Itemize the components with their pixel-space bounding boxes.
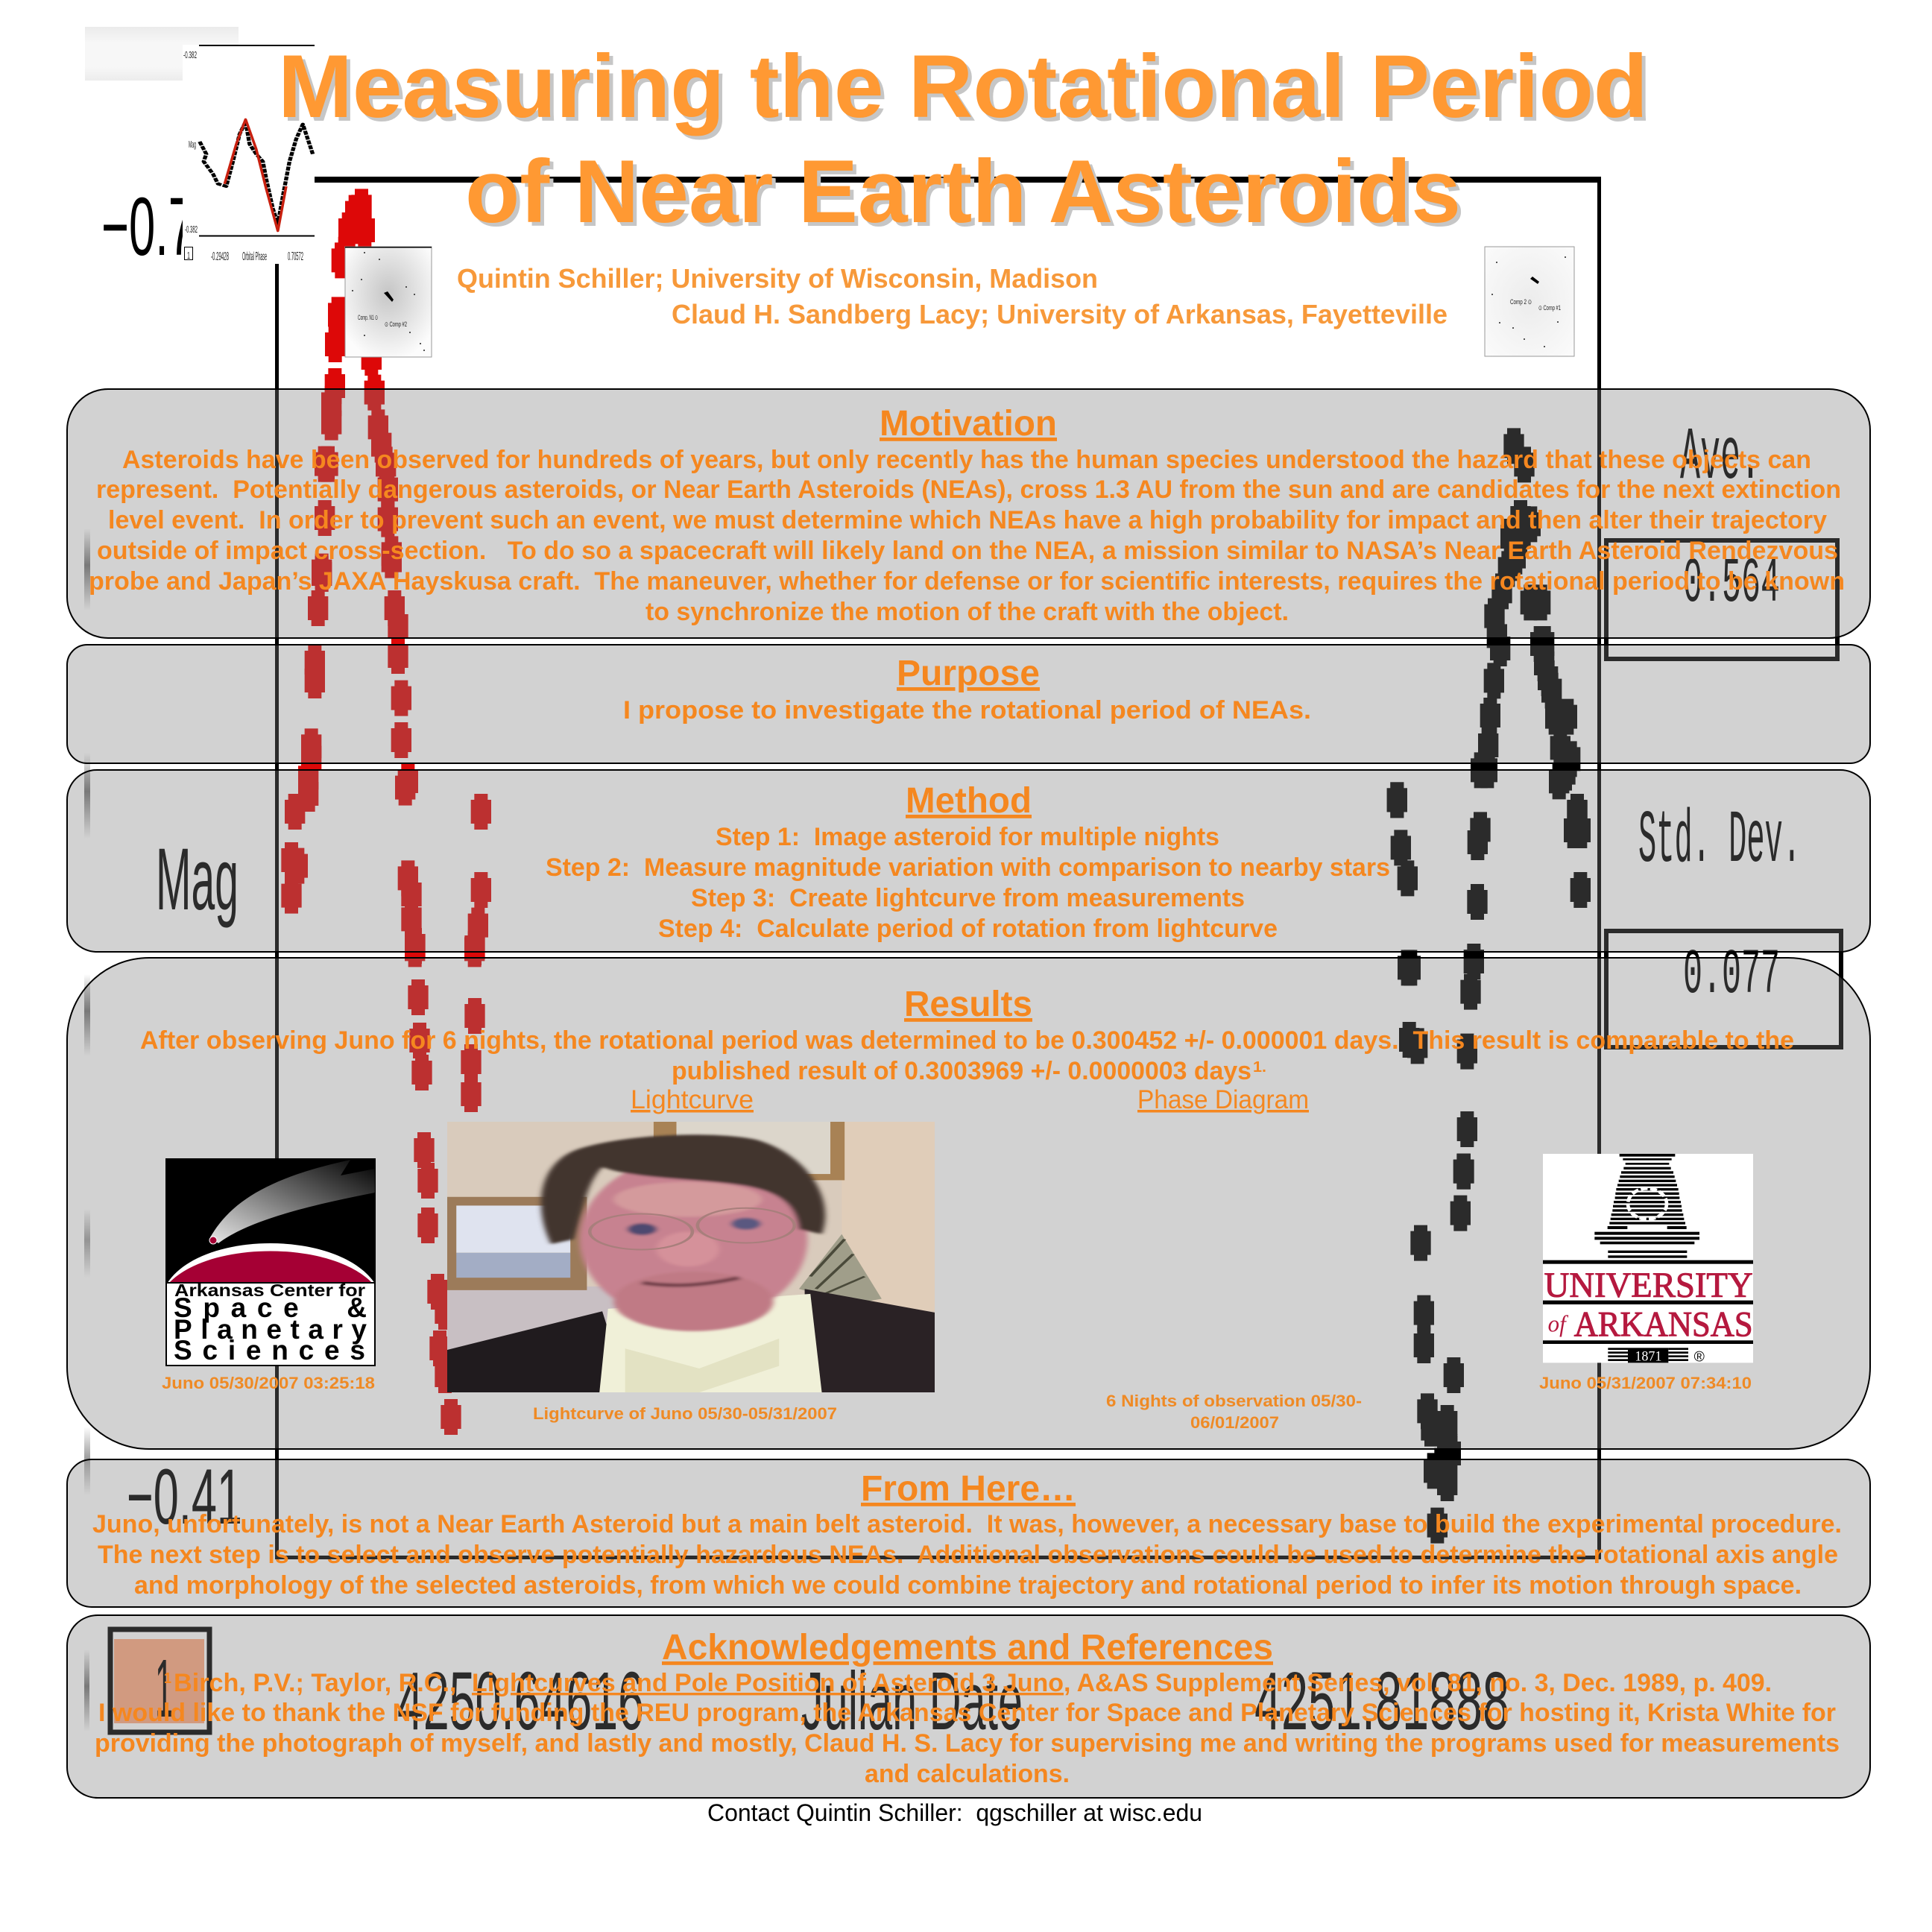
inset labels	[183, 49, 303, 263]
section: motivation: outside of impact cross-section. To do so a spacecraft will likely land on the NEA, a mission similar to NASA’s Near Earth Asteroid Rendezvous	[97, 537, 1838, 565]
section: motivation: probe and Japan’s JAXA Hayskusa craft. The maneuver, whether for defense or for scientific interests, requires the rotational period to be known	[89, 567, 1845, 596]
image captions: 6 Nights of observation 05/30-	[1106, 1392, 1362, 1410]
inset labels: -0.29428	[211, 250, 229, 263]
section: acknowledgements and references: and calculations.	[865, 1760, 1070, 1788]
inset labels: -0.382	[185, 224, 198, 235]
section: method: Step 3: Create lightcurve from measurements	[691, 884, 1245, 912]
section: results text: 1.	[1253, 1059, 1266, 1076]
image: Juno frame 05/30: ⊙ Comp #2	[385, 321, 407, 328]
inset labels: -0.382	[183, 49, 197, 60]
image captions: 06/01/2007	[1190, 1413, 1279, 1432]
section: results text: published result of 0.3003969 +/- 0.0000003 days	[672, 1057, 1251, 1085]
section: purpose	[623, 654, 1311, 724]
contact line: Contact Quintin Schiller: qgschiller at wisc.edu	[707, 1799, 1202, 1826]
small phase diagram inset: 0.70572	[288, 250, 303, 263]
section: motivation: Asteroids have been observed for hundreds of years, but only recently has the human species understood the hazard that these objects can	[122, 446, 1811, 474]
section: from here: From Here…	[861, 1469, 1076, 1509]
chart axis labels: 1	[155, 1643, 173, 1734]
section: method: Step 4: Calculate period of rotation from lightcurve	[658, 915, 1278, 943]
section: from here: The next step is to select and observe potentially hazardous NEAs. Additional observations could be used to determine the rotational axis angle	[98, 1541, 1838, 1569]
chart axis labels: Mag	[156, 830, 239, 929]
logo: University of Arkansas: ARKANSAS	[1574, 1306, 1753, 1345]
section: acknowledgements and references: I would like to thank the NSF for funding the REU program, the Arkansas Center for Space and Planetary Sciences for hosting it, Krista White for	[98, 1699, 1836, 1727]
section: method: Method	[906, 781, 1032, 821]
image: Juno frame 05/31: ⊙ Comp #1	[1538, 304, 1561, 312]
logo: Arkansas Center for Space and Planetary Sciences: Sciences	[174, 1335, 365, 1366]
image: Juno frame 05/30: Comp. N1 ⊙	[358, 314, 378, 321]
logo: Arkansas Center for Space and Planetary Sciences: Space &	[174, 1292, 367, 1323]
image: Juno frame 05/30	[345, 247, 432, 357]
section: results text: Results	[904, 985, 1032, 1024]
panel: purpose background	[67, 645, 1870, 763]
background grey gradient box	[85, 27, 239, 80]
logo: Arkansas Center for Space and Planetary Sciences	[165, 1158, 376, 1366]
inset labels: Orbital Phase	[242, 250, 267, 263]
chart statistics: average	[1606, 417, 1837, 659]
chart statistics: standard deviation: 0.077	[1683, 939, 1780, 1011]
section: motivation	[89, 404, 1845, 626]
section: purpose: Purpose	[897, 654, 1040, 693]
title: of Near Earth Asteroids	[465, 142, 1461, 242]
section: motivation: to synchronize the motion of the craft with the object.	[645, 598, 1289, 626]
chart statistics: standard deviation	[1606, 800, 1841, 1047]
section: results text: After observing Juno for 6 nights, the rotational period was determined to be 0.300452 +/- 0.000001 days. This result is comparable to the	[140, 1026, 1794, 1055]
section: acknowledgements and references: , A&AS Supplement Series, vol. 81, no. 3, Dec. 1989, p. 409.	[1064, 1669, 1772, 1697]
chart axis labels: −0.7	[101, 181, 195, 273]
section: from here: and morphology of the selected asteroids, from which we could combine trajectory and rotational period to infer its motion through space.	[134, 1571, 1802, 1600]
image captions: Juno 05/30/2007 03:25:18	[162, 1374, 375, 1392]
image: Juno frame 05/31	[1485, 247, 1574, 356]
chart axis labels: Julian Date	[801, 1655, 1023, 1747]
panel: results background	[67, 958, 1870, 1449]
inset labels: Mag	[189, 139, 196, 150]
logo: Arkansas Center for Space and Planetary Sciences: Arkansas Center for	[174, 1281, 365, 1300]
chart axis labels: 4250.64616	[397, 1655, 644, 1747]
section: purpose: I propose to investigate the rotational period of NEAs.	[623, 696, 1311, 724]
chart axis labels	[101, 181, 1509, 1747]
logo: University of Arkansas: 1871	[1635, 1349, 1661, 1365]
panel: motivation background	[67, 389, 1870, 638]
section: method	[546, 781, 1390, 943]
section: method: Step 2: Measure magnitude variation with comparison to nearby stars	[546, 853, 1390, 882]
section: acknowledgements and references: Lightcurves and Pole Position of Asteroid 3 Juno	[472, 1669, 1064, 1697]
title: of Near Earth Asteroids	[469, 145, 1465, 245]
section: results text: Phase Diagram	[1137, 1085, 1309, 1114]
title: Measuring the Rotational Period	[278, 37, 1648, 136]
section: acknowledgements and references: Acknowledgements and References	[662, 1628, 1273, 1667]
section: results text: Lightcurve	[631, 1085, 754, 1114]
section: results text	[140, 985, 1794, 1114]
section: acknowledgements and references	[95, 1628, 1840, 1788]
logo: Arkansas Center for Space and Planetary Sciences: Planetary	[174, 1314, 367, 1345]
logo: University of Arkansas: of	[1548, 1310, 1569, 1337]
logo: University of Arkansas: UNIVERSITY	[1544, 1266, 1753, 1305]
section: from here: Juno, unfortunately, is not a Near Earth Asteroid but a main belt asteroid. It was, however, a necessary base to build the experimental procedure.	[92, 1510, 1842, 1538]
logo: University of Arkansas: ®	[1694, 1350, 1705, 1366]
image: Juno frame 05/31: Comp 2 ⊙	[1510, 298, 1532, 306]
panel: acknowledgements background	[67, 1615, 1870, 1798]
section: motivation: level event. In order to prevent such an event, we must determine which NEAs have a high probability for impact and then alter their trajectory	[108, 506, 1827, 534]
authors: Claud H. Sandberg Lacy; University of Arkansas, Fayetteville	[672, 299, 1448, 329]
black data points: second night	[1387, 428, 1591, 1544]
chart axis labels: −0.41	[127, 1453, 242, 1541]
chart frame	[84, 177, 1601, 1731]
section: motivation: represent. Potentially dangerous asteroids, or Near Earth Asteroids (NEAs), cross 1.3 AU from the sun and are candidates for the next extinction	[96, 476, 1841, 504]
chart statistics: average: 0.564	[1683, 548, 1780, 620]
section: method: Step 1: Image asteroid for multiple nights	[716, 823, 1219, 851]
authors: Quintin Schiller; University of Wisconsin, Madison	[457, 263, 1098, 294]
authors	[457, 263, 1448, 329]
red data points: first night	[281, 189, 491, 1435]
photo: portrait	[447, 1122, 935, 1392]
chart statistics: average: Ave.	[1680, 417, 1761, 501]
image captions	[162, 1374, 1752, 1432]
tower	[1594, 1154, 1699, 1258]
panel: from here background	[67, 1459, 1870, 1607]
large stretched phase chart behind panels	[84, 177, 1841, 1747]
image captions: Lightcurve of Juno 05/30-05/31/2007	[533, 1404, 837, 1423]
title: Measuring the Rotational Period	[282, 40, 1652, 140]
section: acknowledgements and references: providing the photograph of myself, and lastly and mostly, Claud H. S. Lacy for supervising me and writing the programs used for measurements	[95, 1729, 1840, 1758]
section: acknowledgements and references: Birch, P.V.; Taylor, R.C.,	[174, 1669, 464, 1697]
small phase diagram inset	[183, 45, 315, 263]
section: motivation: Motivation	[880, 404, 1057, 443]
image captions: Juno 05/31/2007 07:34:10	[1539, 1374, 1752, 1392]
comet	[210, 1160, 375, 1243]
title	[278, 37, 1652, 245]
chart axis labels: 4251.81888	[1254, 1655, 1509, 1747]
section: from here	[92, 1469, 1842, 1600]
inset curve	[200, 119, 313, 231]
inset labels: 1	[187, 250, 190, 261]
logo: University of Arkansas	[1543, 1154, 1753, 1366]
panel: method background	[67, 770, 1870, 952]
section: acknowledgements and references: 1	[164, 1670, 171, 1687]
